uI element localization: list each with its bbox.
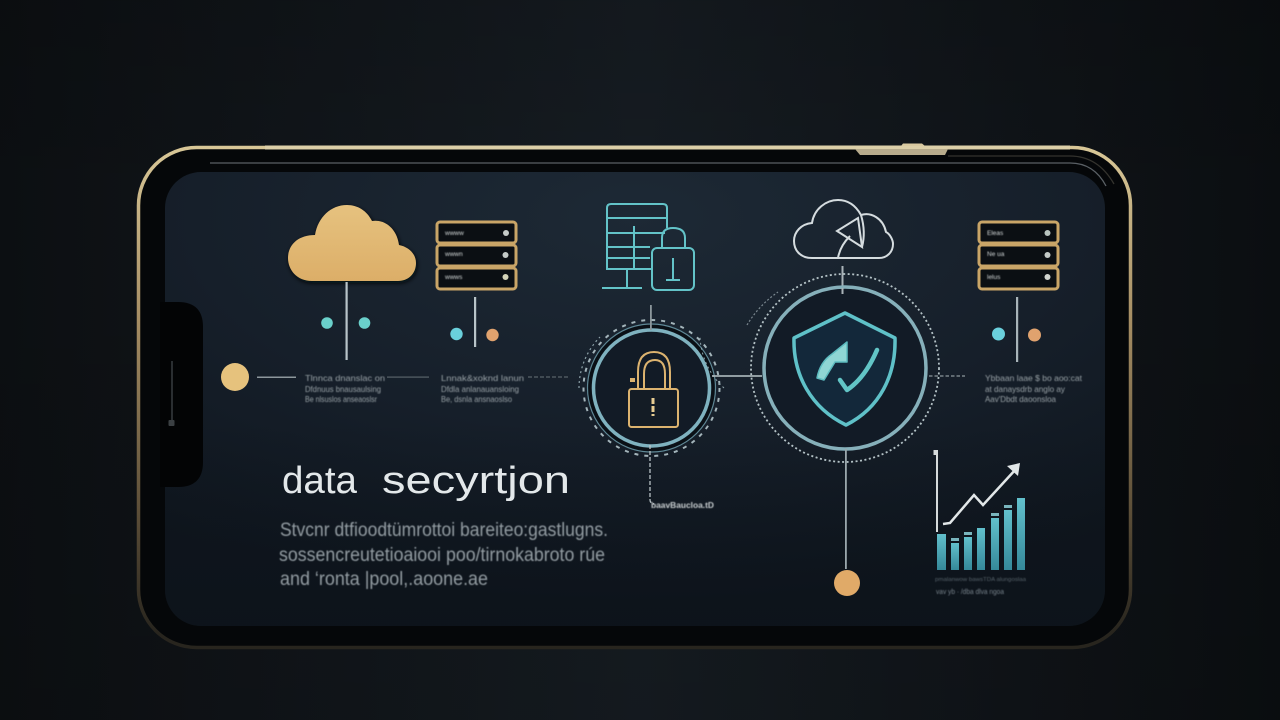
text block 2 <box>441 373 524 404</box>
shield connector top <box>842 288 844 294</box>
text block 1 <box>305 373 385 404</box>
top edge highlight <box>265 146 1070 150</box>
icon: gold server right <box>979 222 1058 289</box>
top button <box>855 149 948 155</box>
right dots <box>992 328 1041 342</box>
icon: gold server left: wwwn <box>444 251 463 258</box>
icon: gold server left: wwww <box>444 230 464 237</box>
text block 1: Tlnnca dnanslac on <box>305 373 385 383</box>
chart captions <box>935 577 1027 596</box>
lock descender and label <box>650 445 714 510</box>
text block 3: Ybbaan laae $ bo aoo:cat <box>985 373 1083 383</box>
lock ring <box>579 320 724 456</box>
chart captions: pmalanwow bawsTDA alungoslaa <box>935 577 1027 583</box>
text block 2: Be, dsnla ansnaoslso <box>441 394 512 404</box>
gold node left <box>221 363 249 391</box>
inner rim <box>210 163 1106 186</box>
node connector <box>257 376 296 378</box>
shield ring <box>747 274 939 462</box>
icon: database with padlock <box>602 204 694 290</box>
text block 1: Be nlsuslos anseaoslsr <box>305 394 377 404</box>
server connector <box>474 297 476 347</box>
title <box>282 460 570 502</box>
gold node bottom <box>834 570 860 596</box>
text block 3: Aav'Dbdt daoonsloa <box>985 394 1056 404</box>
title: secyrtjon <box>382 460 570 502</box>
body text: and ‘ronta |pool,.aoone.ae <box>280 569 488 590</box>
notch speaker <box>168 361 174 426</box>
right connector <box>929 375 965 377</box>
chart captions: vav yb · /dba dlva ngoa <box>936 589 1004 596</box>
body text <box>279 520 608 590</box>
gold bezel <box>138 148 1130 648</box>
icon: gold server right: Eleas <box>987 230 1004 237</box>
icon: gold server right: Ne ua <box>987 251 1005 258</box>
text block 3 <box>985 373 1083 404</box>
text block 2: Lnnak&xoknd lanun <box>441 373 524 383</box>
camera bump <box>901 144 925 146</box>
icon: shield check <box>794 313 895 425</box>
body text: Stvcnr dtfioodtümrottoi bareiteo:gastlugns. <box>280 520 608 541</box>
lock descender and label: baavBaucloa.tD <box>651 501 714 510</box>
cloud connector <box>346 282 348 360</box>
icon: gold server right: lelus <box>987 274 1001 281</box>
text block 3: at danaysdrb anglo ay <box>985 384 1066 394</box>
phone frame <box>138 144 1130 648</box>
icon: outline cloud with arrow <box>794 200 893 258</box>
cloud teal dots <box>321 317 370 329</box>
cloud line <box>842 266 844 288</box>
body text: sossencreutetioaiooi poo/tirnokabroto rúe <box>279 545 605 566</box>
screen <box>165 172 1105 626</box>
dashes 2 <box>528 376 570 378</box>
icon: gold cloud <box>288 205 417 283</box>
lower connector <box>845 449 847 569</box>
icon: gold server left <box>437 222 516 289</box>
bar chart <box>934 450 1027 596</box>
trend arrow <box>943 469 1016 524</box>
right server connector <box>1016 297 1018 362</box>
notch <box>160 302 203 487</box>
icon: gold server left: wwws <box>444 274 463 281</box>
text block 2: Dfdla anlanauansloing <box>441 384 519 394</box>
dashes 1 <box>387 376 429 378</box>
server dots <box>450 328 499 341</box>
title: data <box>282 460 358 502</box>
connector lock to shield <box>712 375 762 377</box>
top lock connector <box>650 305 652 330</box>
bars <box>937 498 1025 570</box>
text block 1: Dfdnuus bnausaulsing <box>305 384 381 394</box>
icon: gold padlock <box>629 352 678 427</box>
chart axis <box>936 450 938 532</box>
